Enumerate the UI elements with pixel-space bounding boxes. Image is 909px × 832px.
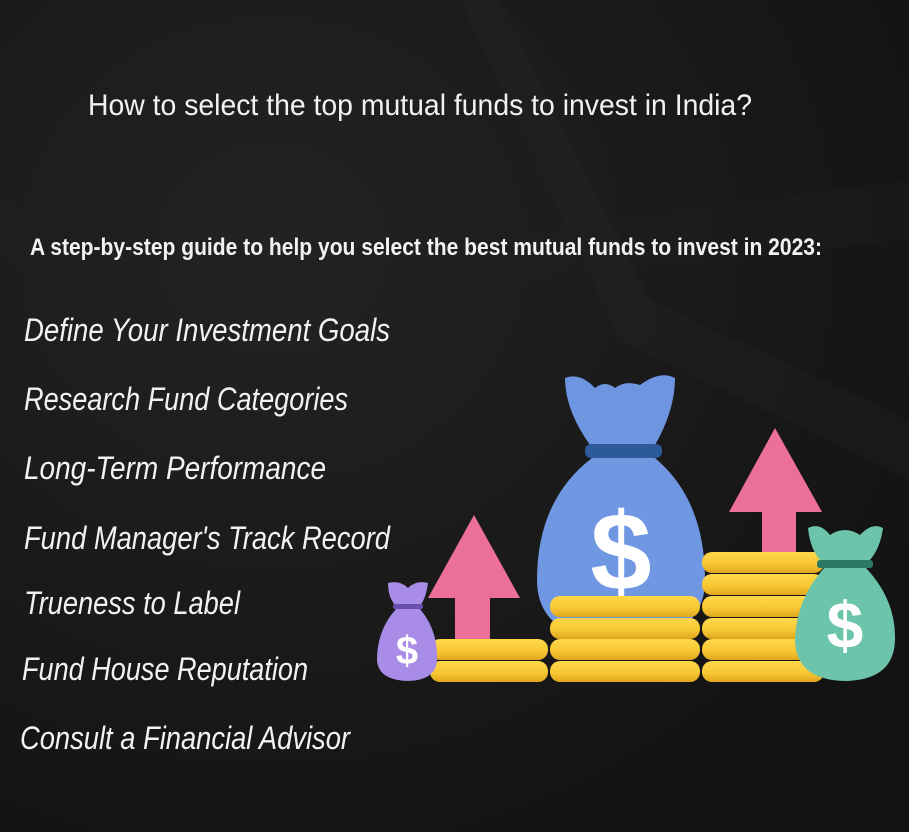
illustration: money bags, arrows and coins xyxy=(377,375,895,682)
list of steps: Fund Manager's Track Record xyxy=(24,520,391,556)
icon: green money bag xyxy=(795,526,895,681)
icon: left arrow xyxy=(428,515,520,642)
list of steps: Long-Term Performance xyxy=(24,450,326,486)
icon: green money bag: $ xyxy=(827,588,863,662)
icon: coin stacks xyxy=(430,552,824,682)
list of steps: Define Your Investment Goals xyxy=(24,312,390,348)
icon: purple money bag xyxy=(377,582,437,681)
list of steps xyxy=(20,312,391,756)
list of steps: Research Fund Categories xyxy=(24,381,348,417)
icon: purple money bag: $ xyxy=(396,629,418,673)
title: How to select the top mutual funds to invest in India? xyxy=(88,89,752,122)
list of steps: Consult a Financial Advisor xyxy=(20,720,351,756)
list of steps: Fund House Reputation xyxy=(22,651,308,687)
icon: right arrow xyxy=(729,428,822,554)
subtitle: A step-by-step guide to help you select the best mutual funds to invest in 2023: xyxy=(30,234,822,261)
icon: big blue money bag xyxy=(537,375,705,642)
icon: big blue money bag: $ xyxy=(590,491,652,614)
list of steps: Trueness to Label xyxy=(24,585,241,621)
